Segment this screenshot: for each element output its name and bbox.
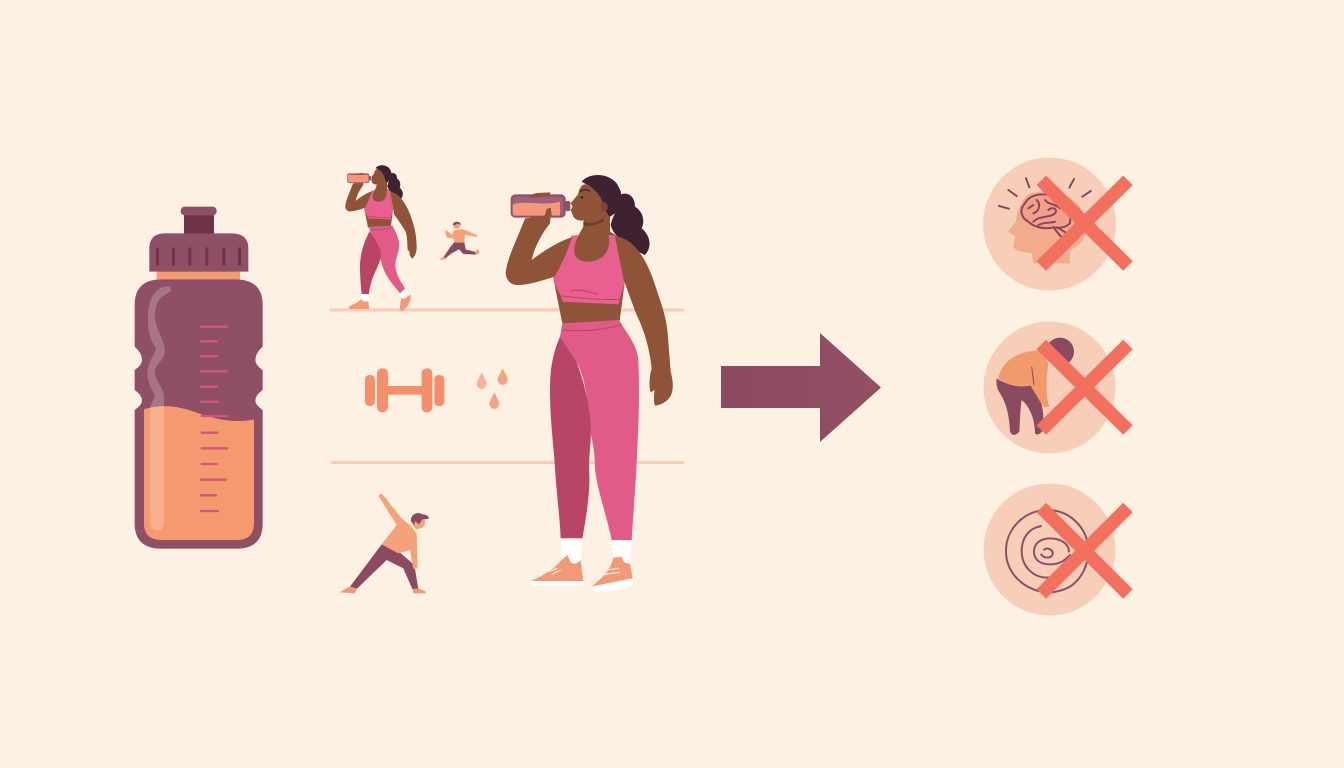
- red cross: [1041, 344, 1128, 430]
- socks: [362, 288, 408, 302]
- leggings: [360, 226, 405, 294]
- red cross: [1041, 180, 1128, 266]
- water bottle in hand: [511, 192, 570, 222]
- bottle cap: [149, 233, 248, 272]
- head and torso: [553, 184, 625, 323]
- right shoe: [591, 557, 633, 592]
- shoes: [349, 295, 411, 312]
- red cross: [1041, 508, 1128, 594]
- raised arm: [506, 208, 578, 285]
- small woman drinking: [345, 165, 417, 312]
- left shoe: [531, 555, 583, 586]
- lowered arm: [390, 192, 417, 259]
- circle background: [983, 158, 1116, 290]
- sports bra: [553, 235, 625, 304]
- icon: sweat drops: [477, 368, 508, 409]
- icon: dumbbell: [365, 368, 444, 412]
- bottle body: [135, 279, 263, 549]
- bottle nozzle: [181, 207, 217, 234]
- large woman drinking: [506, 175, 673, 592]
- circle background: [984, 322, 1116, 454]
- socks: [561, 538, 632, 565]
- measurement ticks: [201, 327, 228, 511]
- bottle collar: [157, 270, 240, 282]
- upper body: [506, 175, 650, 323]
- hair: [582, 175, 650, 255]
- leggings left leg: [550, 337, 591, 538]
- upper body: [345, 165, 403, 227]
- spiral: [1006, 510, 1088, 592]
- arrow: [721, 333, 881, 442]
- ground line lower: [331, 461, 684, 464]
- water level fill: [144, 406, 254, 540]
- circle background: [984, 484, 1116, 616]
- lowered arm: [615, 236, 673, 406]
- bent over person: [996, 338, 1074, 435]
- leggings right leg: [560, 320, 639, 540]
- icon: fatigue crossed out: [984, 322, 1128, 454]
- icon: brain fog crossed out: [983, 158, 1128, 290]
- stretching person: [340, 493, 429, 593]
- head with brain: [999, 178, 1091, 263]
- small runner: [440, 222, 480, 260]
- icon: dizziness crossed out: [984, 484, 1128, 616]
- highlight: [147, 287, 171, 531]
- icon: sports water bottle: [135, 207, 263, 549]
- ground line upper: [330, 308, 684, 312]
